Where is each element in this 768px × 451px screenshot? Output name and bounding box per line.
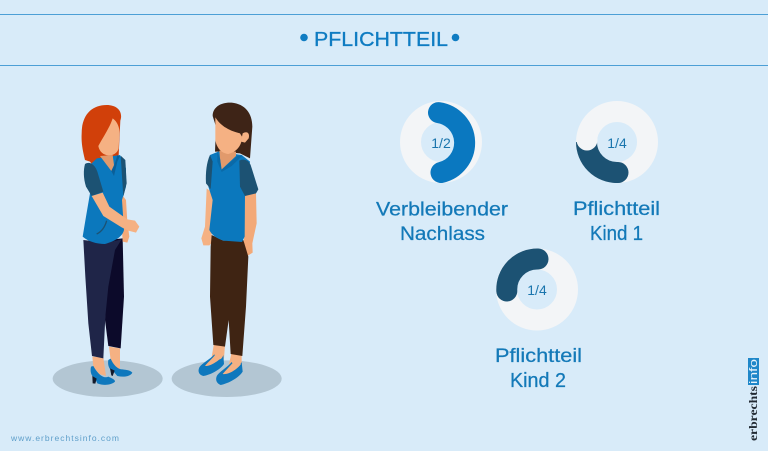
front leg lower xyxy=(92,357,106,376)
legs xyxy=(210,343,225,367)
sleeve xyxy=(84,163,103,196)
figure: woman with brown hair xyxy=(172,103,282,397)
pocket xyxy=(97,221,107,234)
back hair xyxy=(82,105,121,175)
shirt xyxy=(208,152,250,242)
far arm xyxy=(121,193,129,243)
logo: erbrechtsinfo xyxy=(746,358,760,441)
label: Verbleibender Nachlass xyxy=(376,200,509,245)
hair xyxy=(213,103,252,158)
footer url: www.erbrechtsinfo.com xyxy=(10,433,119,443)
face xyxy=(98,118,119,155)
label: Pflichtteil Kind 1 xyxy=(573,199,660,245)
logo: erbrechtsinfo: info xyxy=(748,359,760,384)
label: Pflichtteil Kind 2: Kind 2 xyxy=(510,370,566,392)
collar and neck xyxy=(100,155,114,171)
face and ear xyxy=(215,117,242,154)
donut: Pflichtteil Kind 1 1/4: 1/4 xyxy=(607,135,627,151)
back leg lower xyxy=(109,347,120,369)
shadow: left figure xyxy=(53,360,163,397)
figure: woman with red hair xyxy=(53,105,163,397)
title: PFLICHTTEIL xyxy=(314,29,448,51)
label: Pflichtteil Kind 1: Pflichtteil xyxy=(573,199,660,220)
trousers xyxy=(210,235,248,356)
donut: Pflichtteil Kind 2 1/4 xyxy=(506,259,568,320)
label: Pflichtteil Kind 2: Pflichtteil xyxy=(495,346,582,367)
front shoe xyxy=(91,366,115,385)
shoes xyxy=(199,354,224,376)
trousers xyxy=(105,238,124,348)
label: Pflichtteil Kind 1: Kind 1 xyxy=(590,223,643,245)
back shoe xyxy=(108,359,132,377)
logo: erbrechtsinfo: erbrechts xyxy=(746,386,760,441)
shadow: right figure xyxy=(172,360,282,397)
arm xyxy=(92,193,139,233)
label: Verbleibender Nachlass: Verbleibender xyxy=(376,200,509,220)
label: Verbleibender Nachlass: Nachlass xyxy=(400,224,485,245)
donut: Verbleibender Nachlass 1/2 xyxy=(410,112,472,172)
sleeves xyxy=(206,155,213,189)
donut: Pflichtteil Kind 1 1/4 xyxy=(576,112,648,172)
donut: Pflichtteil Kind 2 1/4: 1/4 xyxy=(527,282,547,298)
shirt xyxy=(83,155,126,244)
arms xyxy=(201,188,213,245)
donut: Verbleibender Nachlass 1/2: 1/2 xyxy=(431,135,451,151)
neck and collar xyxy=(219,151,236,169)
label: Pflichtteil Kind 2 xyxy=(495,346,582,392)
